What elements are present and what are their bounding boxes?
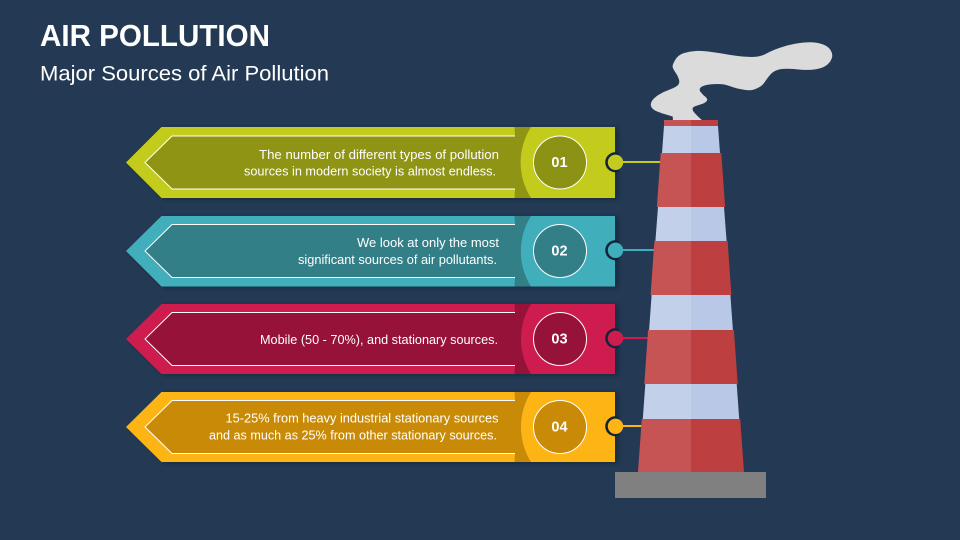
smoke [651, 42, 832, 121]
inner arrow fill [145, 400, 515, 454]
chimney light bands [643, 126, 739, 419]
connector dot [605, 152, 623, 172]
chimney illustration [615, 42, 832, 498]
banner shape [126, 216, 615, 286]
banner shape [126, 304, 615, 374]
number badge: 03 [551, 332, 568, 348]
description: sources in modern society is almost endless. [244, 164, 496, 178]
number badge: 01 [551, 155, 568, 171]
connector dot [605, 328, 623, 348]
crescent [514, 216, 531, 286]
inner arrow fill [145, 312, 515, 366]
inner outline [145, 136, 515, 189]
crescent [514, 127, 531, 198]
connector dot [605, 240, 623, 260]
title: AIR POLLUTION [40, 18, 270, 53]
description [244, 147, 499, 178]
panel: source 04 [126, 392, 623, 462]
description: 15-25% from heavy industrial stationary sources [226, 411, 499, 426]
inner outline [145, 224, 515, 278]
panel: source 02 [126, 216, 623, 286]
description: and as much as 25% from other stationary sources. [209, 428, 497, 443]
number badge [534, 400, 586, 454]
crescent [514, 304, 531, 374]
banner shape [126, 392, 615, 462]
description: significant sources of air pollutants. [298, 252, 497, 267]
chimney base [615, 472, 766, 498]
inner outline [145, 312, 515, 366]
description: The number of different types of pollution [259, 147, 499, 162]
crescent [514, 392, 531, 462]
number badge: 04 [551, 420, 568, 436]
number badge [534, 312, 586, 366]
number badge [534, 136, 586, 189]
inner arrow fill [145, 224, 515, 278]
description: We look at only the most [357, 235, 499, 250]
inner arrow fill [145, 136, 515, 189]
description [209, 411, 499, 443]
banner shape [126, 127, 615, 198]
number badge [534, 224, 586, 278]
panel: source 03 [126, 304, 623, 374]
description [298, 235, 499, 267]
inner outline [145, 400, 515, 454]
connector lines [620, 162, 670, 426]
connector dot [605, 416, 623, 436]
subtitle: Major Sources of Air Pollution [40, 62, 329, 86]
chimney cap [664, 120, 718, 126]
number badge: 02 [551, 244, 568, 260]
description: Mobile (50 - 70%), and stationary sources. [260, 332, 498, 347]
chimney red bands [638, 153, 744, 472]
panel: source 01 [126, 127, 623, 198]
